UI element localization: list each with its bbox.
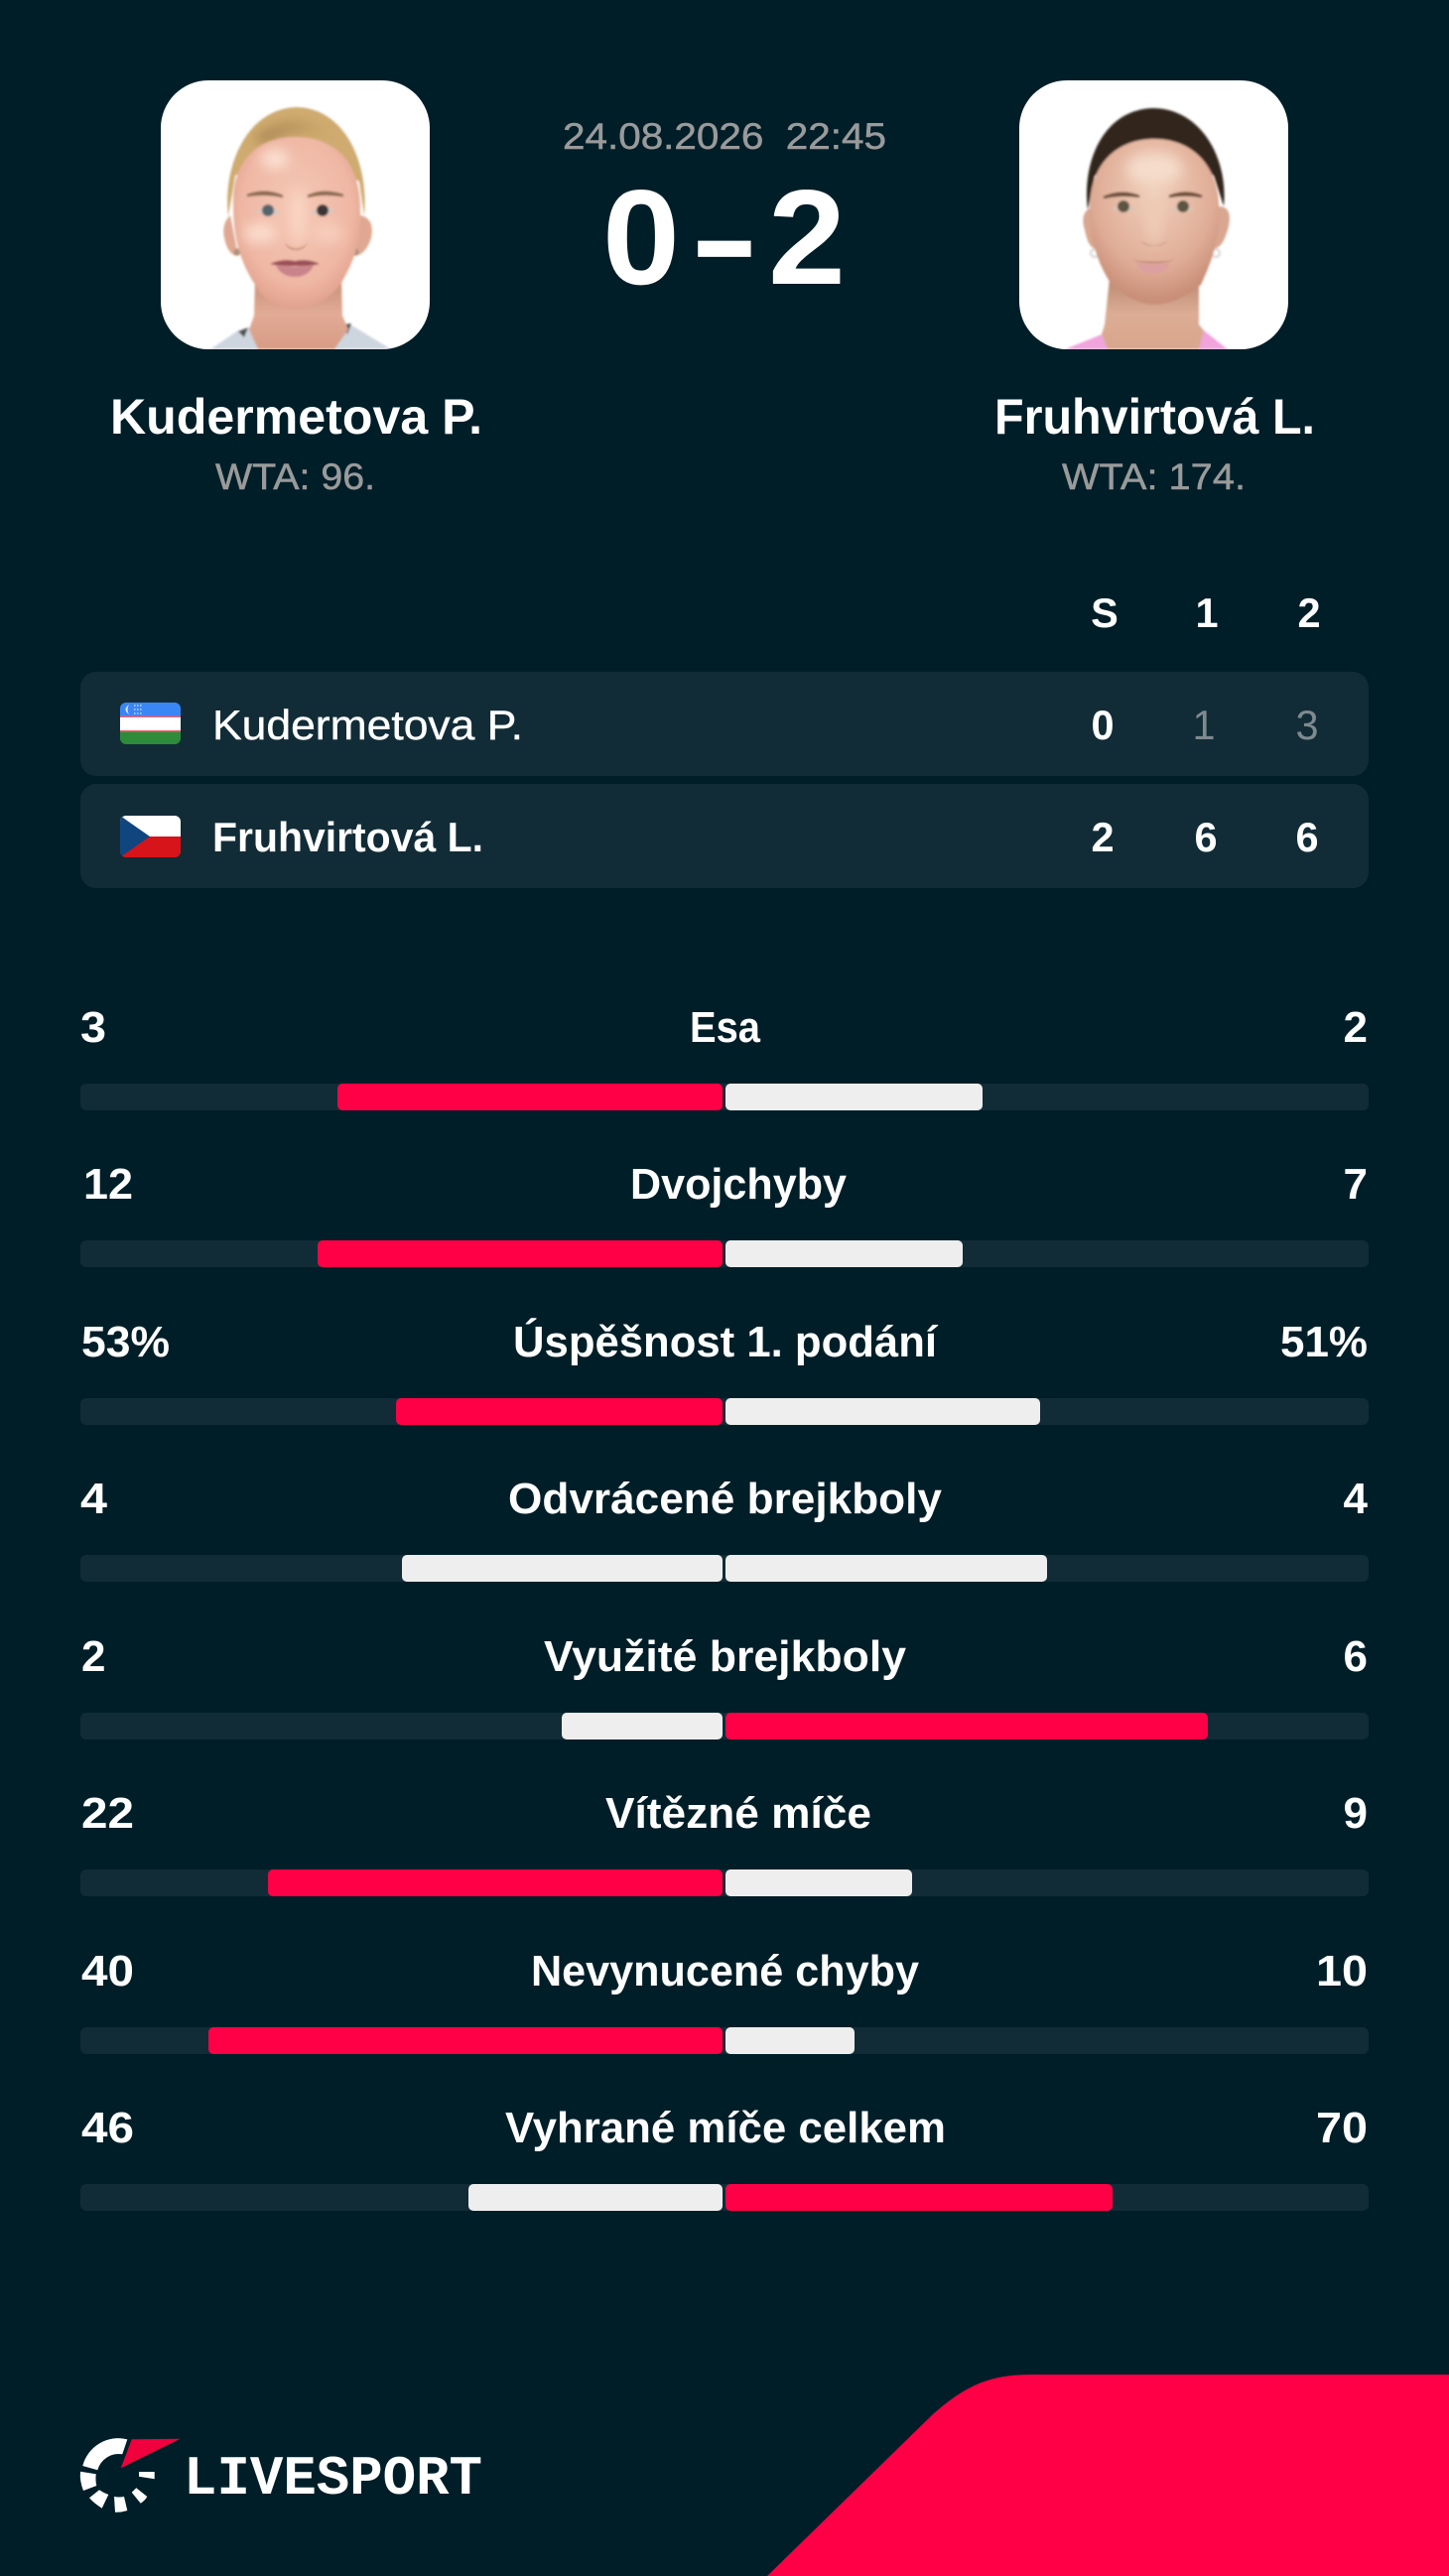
stat: Esa: Esa [690, 1003, 760, 1052]
scores [1091, 814, 1319, 860]
match info: date and score [563, 116, 886, 313]
table header: 1 [1195, 589, 1219, 636]
stat: Dvojchyby: Dvojchyby [630, 1160, 848, 1209]
photo: Kudermetova [161, 80, 430, 349]
stat: Vítězné míče: 22 [81, 1789, 134, 1838]
stat: Vyhrané míče celkem: Vyhrané míče celkem [505, 2104, 946, 2152]
row: Fruhvirtová [80, 784, 1369, 888]
scores: 1 [1192, 702, 1216, 748]
scores: 0 [1091, 702, 1115, 748]
stat: Úspěšnost 1. podání: 51% [1280, 1318, 1368, 1366]
stat: Vítězné míče: Vítězné míče [605, 1789, 871, 1838]
statistics [80, 1003, 1369, 2211]
stat: Úspěšnost 1. podání: 53% [81, 1318, 170, 1366]
stat: Využité brejkboly: Využité brejkboly [544, 1632, 907, 1681]
logo icon [80, 2438, 181, 2512]
photo: Fruhvirtová [1019, 80, 1288, 349]
stat: Vyhrané míče celkem [80, 2104, 1369, 2211]
stat: Úspěšnost 1. podání: Úspěšnost 1. podání [513, 1317, 939, 1366]
score table [80, 589, 1369, 888]
stat: Esa: 2 [1344, 1003, 1368, 1052]
stat: Dvojchyby: 12 [83, 1160, 133, 1209]
stat: Odvrácené brejkboly [80, 1475, 1369, 1582]
corner accent shape [767, 2375, 1449, 2576]
scores [1091, 702, 1319, 748]
stat: Vítězné míče [80, 1789, 1369, 1896]
stat: Nevynucené chyby: Nevynucené chyby [531, 1947, 920, 1996]
stat: Nevynucené chyby [80, 1947, 1369, 2054]
name: Kudermetova P. [212, 702, 523, 748]
score 0-2: - [690, 162, 759, 313]
name: Kudermetova P.: Kudermetova P. [110, 389, 482, 445]
stat: Odvrácené brejkboly: 4 [80, 1475, 108, 1523]
stat: Využité brejkboly: 6 [1344, 1632, 1368, 1681]
stat: Esa: 3 [80, 1003, 106, 1052]
scores: 2 [1091, 814, 1115, 860]
stat: Nevynucené chyby: 40 [81, 1947, 134, 1996]
wordmark: LIVESPORT [184, 2447, 482, 2511]
name: Fruhvirtová L. [212, 814, 483, 860]
stat: Využité brejkboly: 2 [81, 1632, 105, 1681]
logo: Livesport [80, 2438, 482, 2512]
date and time: 24.08.2026 22:45 [563, 116, 886, 157]
flag: Czech Republic [120, 816, 181, 857]
stat: Dvojchyby [80, 1160, 1369, 1267]
player: Fruhvirtová L. [994, 80, 1315, 497]
stat: Esa [80, 1003, 1369, 1110]
scores: 6 [1194, 814, 1218, 860]
score 0-2: 0 [602, 162, 680, 313]
stat: Nevynucené chyby: 10 [1316, 1947, 1368, 1996]
stat: Úspěšnost 1. podání [80, 1317, 1369, 1425]
name: Fruhvirtová L.: Fruhvirtová L. [994, 389, 1315, 445]
table header [1091, 589, 1321, 636]
stat: Dvojchyby: 7 [1344, 1160, 1368, 1209]
rank: WTA 96: WTA: 96. [215, 456, 375, 497]
rank: WTA 174: WTA: 174. [1062, 456, 1246, 497]
stat: Odvrácené brejkboly: 4 [1344, 1475, 1369, 1523]
stat: Vyhrané míče celkem: 46 [81, 2104, 134, 2152]
scores: 3 [1295, 702, 1319, 748]
row: Kudermetova [80, 672, 1369, 776]
table header: 2 [1297, 589, 1321, 636]
score 0-2 [602, 162, 846, 313]
stat: Využité brejkboly [80, 1632, 1369, 1739]
player: Kudermetova P. [110, 80, 482, 497]
stat: Odvrácené brejkboly: Odvrácené brejkboly [508, 1475, 943, 1523]
flag: Uzbekistan [120, 703, 181, 744]
stat: Vítězné míče: 9 [1344, 1789, 1368, 1838]
stat: Vyhrané míče celkem: 70 [1316, 2104, 1368, 2152]
scores: 6 [1295, 814, 1319, 860]
table header: S [1091, 589, 1119, 636]
score 0-2: 2 [768, 162, 846, 313]
